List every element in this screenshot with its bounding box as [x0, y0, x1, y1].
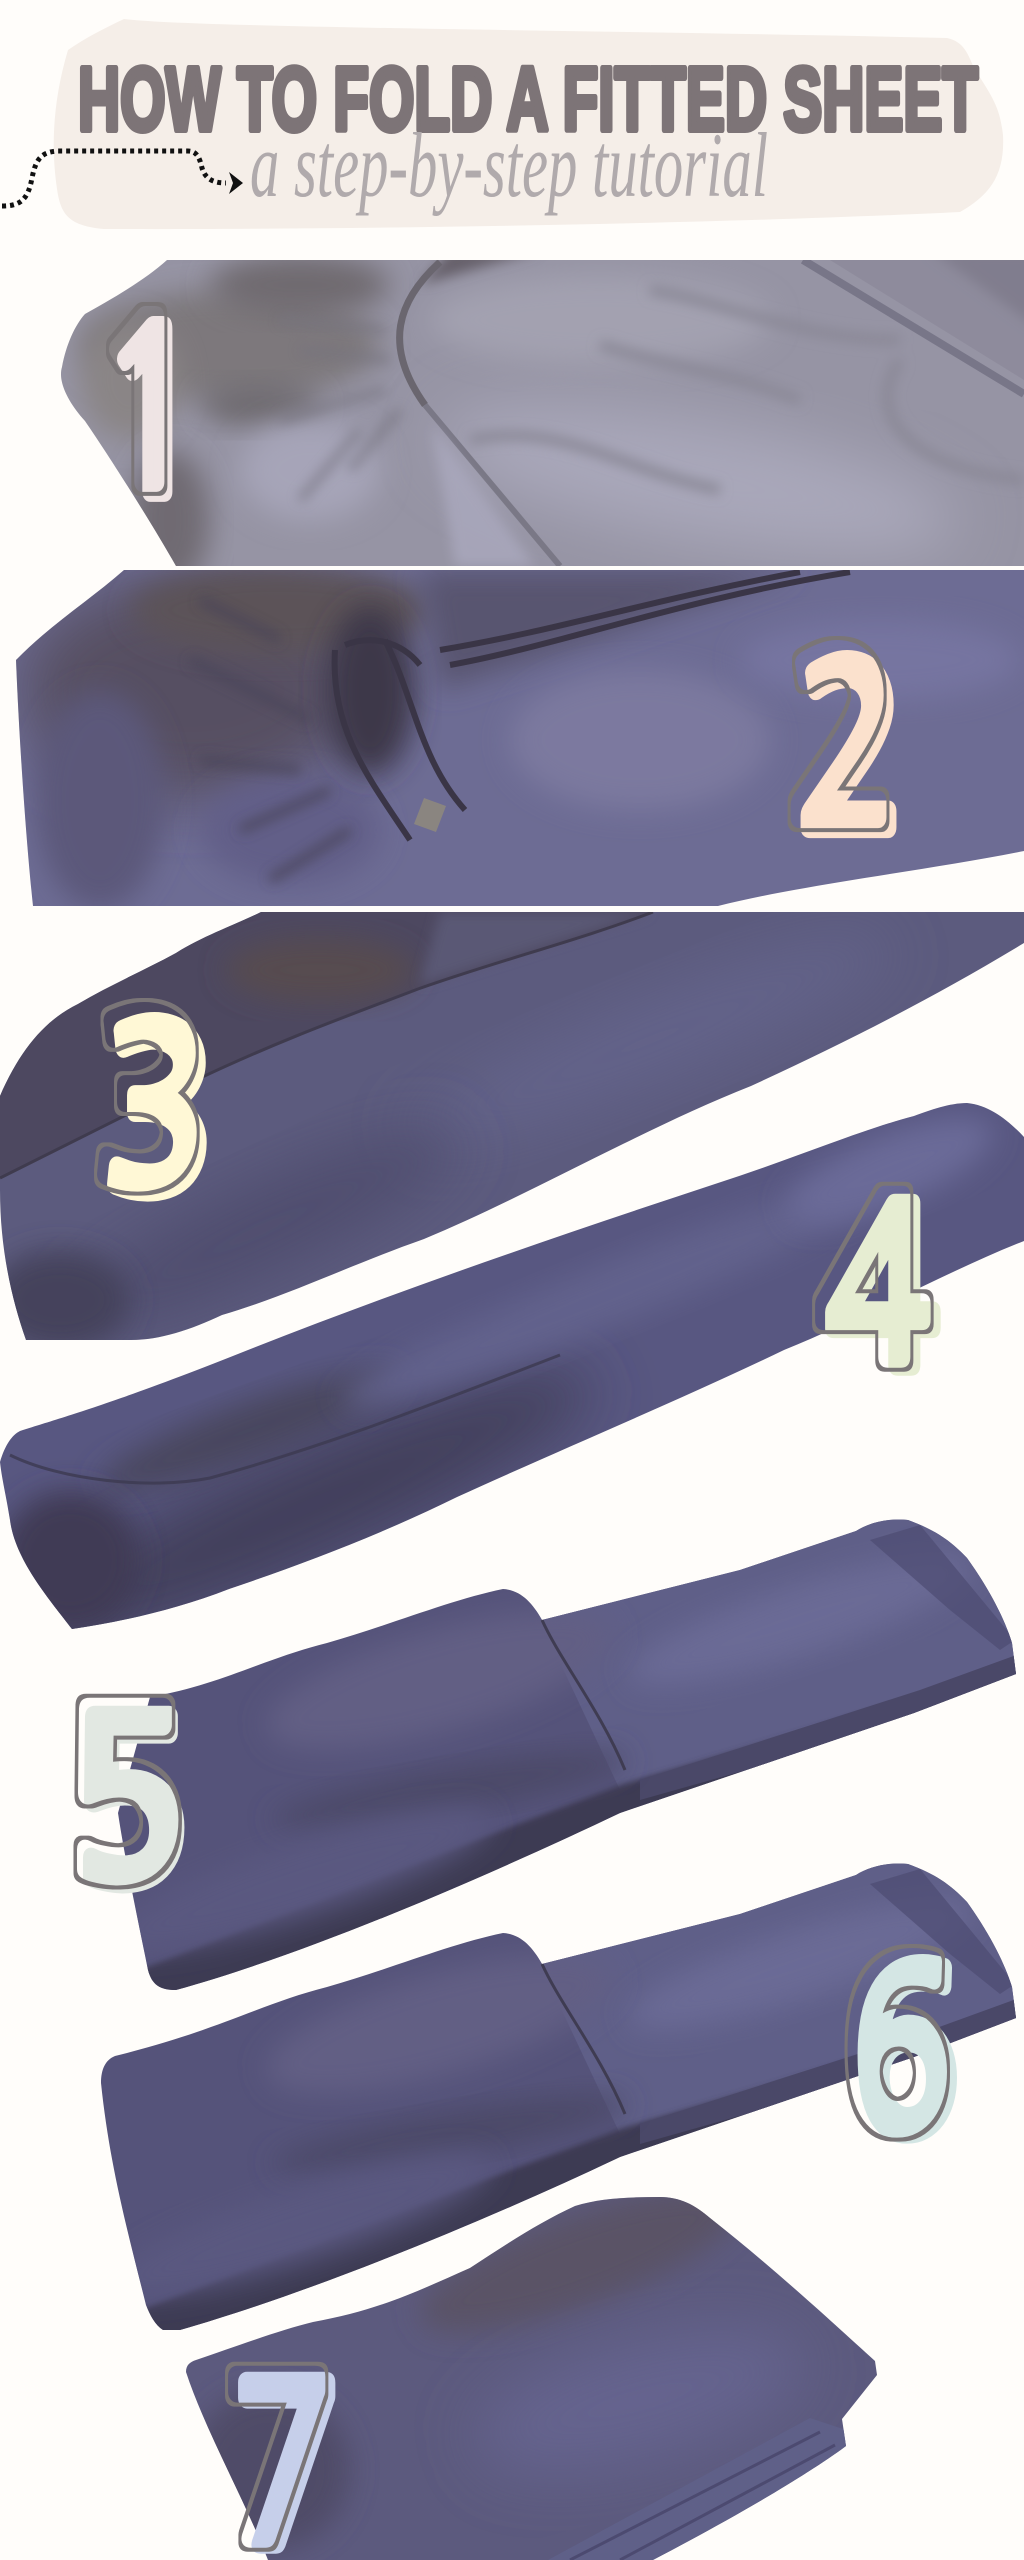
photo step 4: long folded strip [0, 1103, 1024, 1629]
number 3: 3 [92, 992, 206, 1216]
number 5: 5 [70, 1694, 191, 1918]
arrow head [229, 172, 243, 194]
photo step 5: end folded toward middle [118, 1520, 1016, 1990]
dotted arrow pointing to subtitle [2, 151, 243, 206]
number 2: 2 [786, 630, 897, 854]
number 6: 6 [842, 1940, 950, 2162]
number 2: 2 [796, 640, 907, 864]
number 1: 1 [92, 296, 199, 519]
number 3: 3 [102, 1002, 216, 1226]
banner background shape [54, 19, 1003, 229]
photo step 6: other end folded in [90, 1850, 1024, 2350]
photo step 7: finished folded sheet [186, 2197, 877, 2560]
number 1: 1 [100, 306, 207, 529]
number 4: 4 [816, 1175, 930, 1393]
photo step 1: sheet corner with elastic seam [61, 260, 1024, 566]
photo step 3: folded corner over [0, 900, 1024, 1364]
photo step 2: corners tucked together [0, 560, 1024, 920]
title banner [54, 19, 1003, 229]
garment label tag [414, 798, 446, 832]
number 5: 5 [64, 1686, 185, 1910]
number 6: 6 [852, 1946, 960, 2168]
number 4: 4 [826, 1183, 940, 1401]
